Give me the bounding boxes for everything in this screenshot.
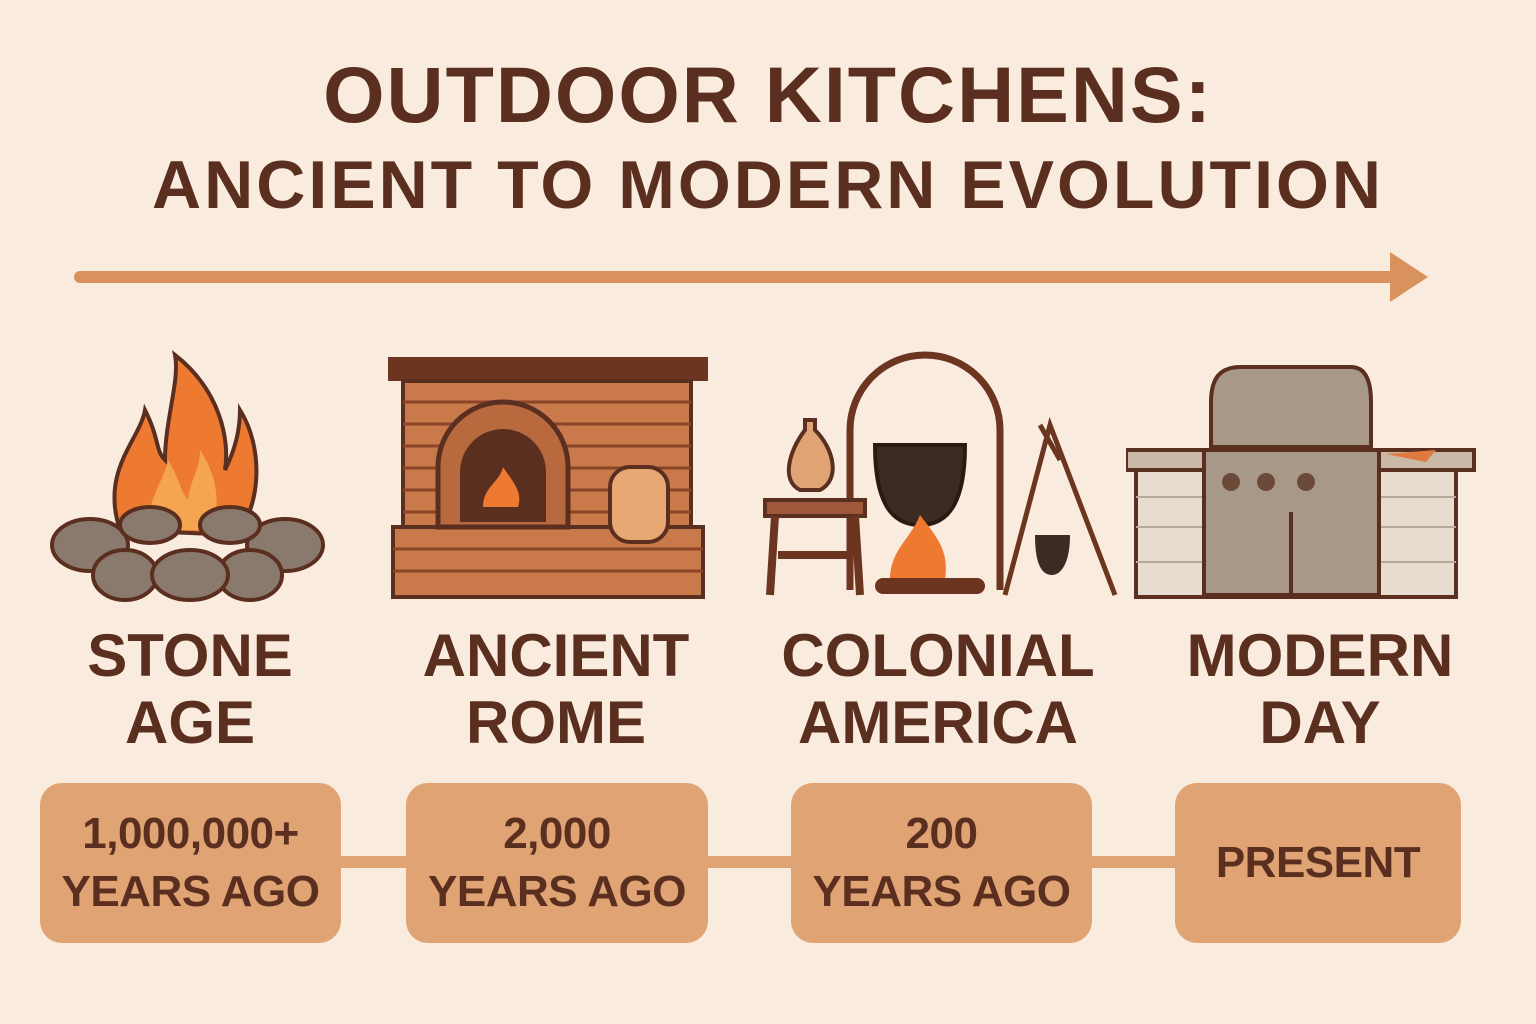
box: 1,000,000+ years ago xyxy=(40,783,341,943)
connector line xyxy=(300,856,1220,868)
label: stone age: AGE xyxy=(125,689,255,756)
box: 200 years ago: YEARS AGO xyxy=(813,867,1070,916)
label: ancient rome: ROME xyxy=(466,689,646,756)
box: 1,000,000+ years ago: 1,000,000+ xyxy=(82,809,299,858)
box: present xyxy=(1175,783,1461,943)
box: 200 years ago: 200 xyxy=(906,809,977,858)
title xyxy=(152,50,1384,223)
label: modern day: MODERN xyxy=(1187,622,1453,689)
icon: roman brick oven xyxy=(388,357,708,599)
label: stone age: STONE xyxy=(87,622,293,689)
box: 1,000,000+ years ago: YEARS AGO xyxy=(62,867,319,916)
icon: colonial cauldron xyxy=(763,352,1118,596)
label: modern day xyxy=(1187,622,1453,756)
label: ancient rome: ANCIENT xyxy=(423,622,689,689)
box: 2,000 years ago xyxy=(406,783,708,943)
label: colonial america: COLONIAL xyxy=(781,622,1095,689)
box: 2,000 years ago: YEARS AGO xyxy=(428,867,686,916)
icon: campfire xyxy=(50,350,325,602)
title: OUTDOOR KITCHENS: xyxy=(323,50,1213,139)
label: ancient rome xyxy=(423,622,689,756)
label: modern day: DAY xyxy=(1259,689,1381,756)
box: 200 years ago xyxy=(791,783,1092,943)
label: stone age xyxy=(87,622,293,756)
box: 2,000 years ago: 2,000 xyxy=(503,809,611,858)
box: present: PRESENT xyxy=(1216,838,1420,887)
title: ANCIENT TO MODERN EVOLUTION xyxy=(152,147,1384,223)
arrow: timeline xyxy=(74,252,1428,302)
label: colonial america xyxy=(781,622,1095,756)
label: colonial america: AMERICA xyxy=(798,689,1078,756)
icon: modern grill xyxy=(1126,365,1476,599)
